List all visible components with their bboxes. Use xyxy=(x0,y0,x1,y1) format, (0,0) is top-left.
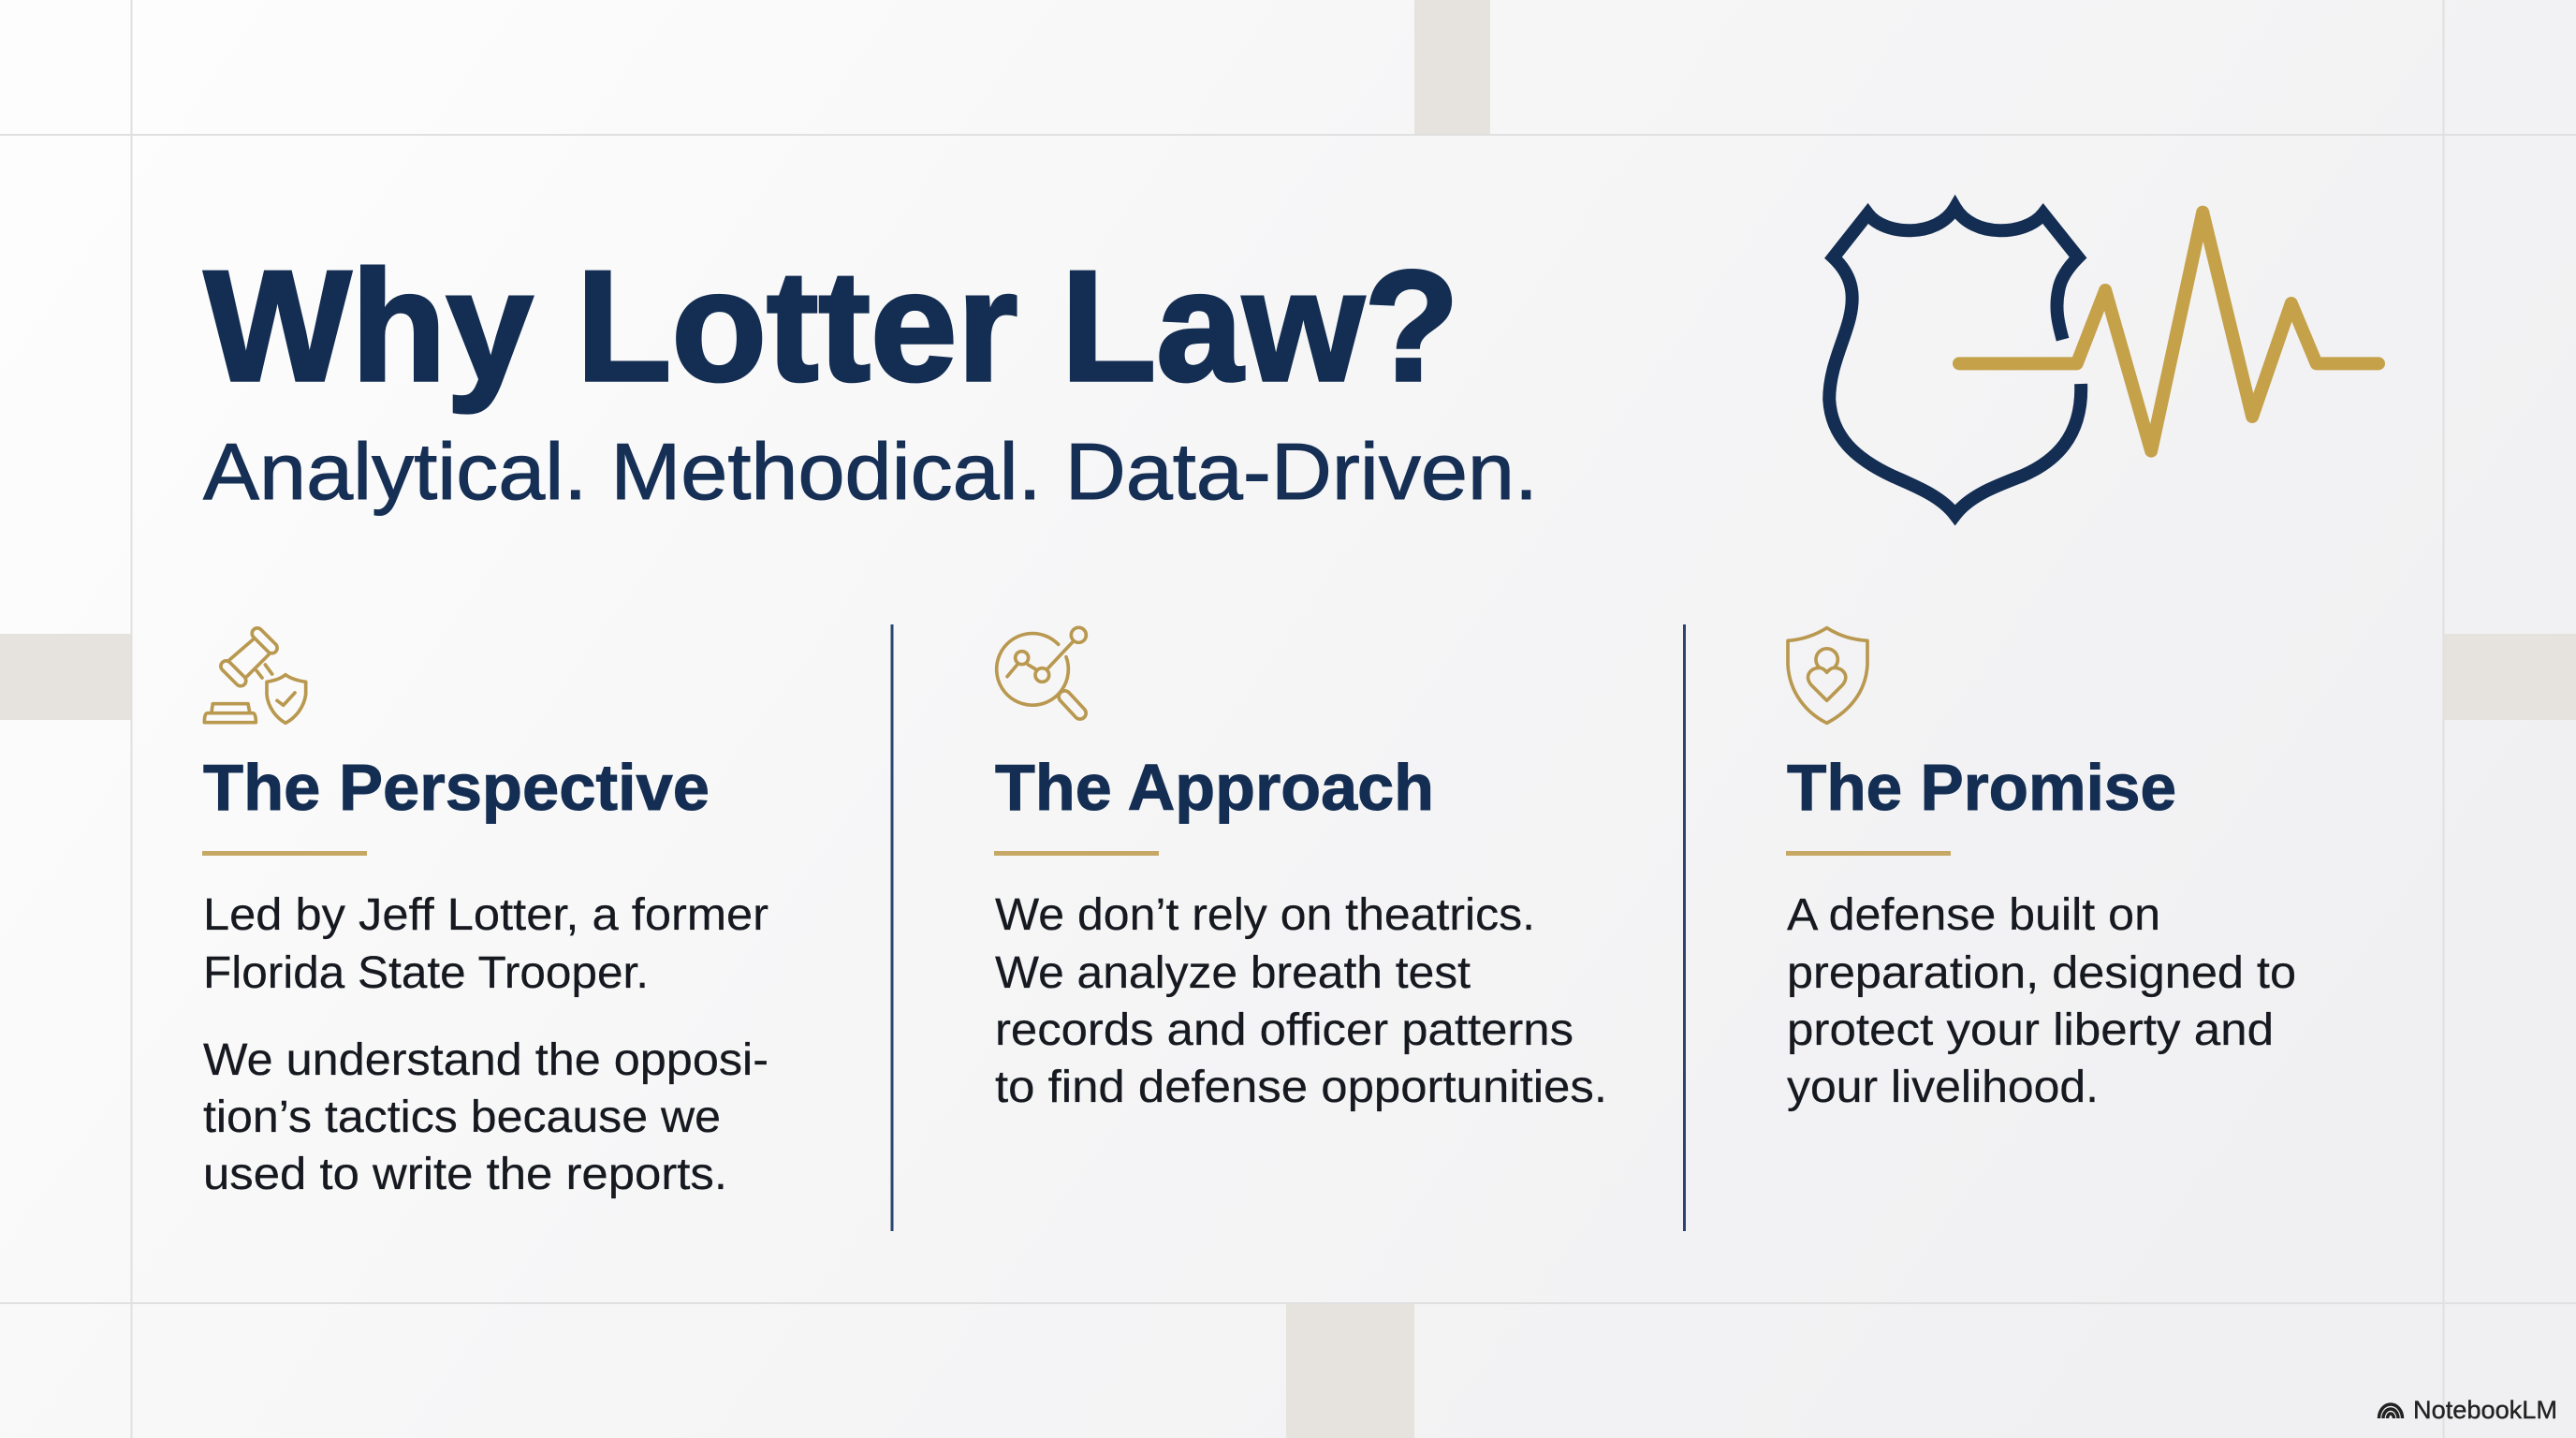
text: perspective paragraph two: tion’s tactics because we xyxy=(203,1093,721,1142)
text: promise paragraph xyxy=(1787,890,2296,1112)
panel: the perspective xyxy=(202,626,768,1199)
icon: police shield with gold pulse line xyxy=(1829,208,2378,515)
text: approach paragraph xyxy=(995,890,1607,1112)
text: perspective paragraph two: used to write the reports. xyxy=(203,1150,727,1199)
text: perspective paragraph two xyxy=(203,1035,768,1199)
text: promise paragraph: A defense built on xyxy=(1787,890,2160,940)
text: perspective paragraph one xyxy=(203,890,768,998)
logo: NotebookLM watermark xyxy=(2379,1396,2557,1424)
icon: gavel and shield xyxy=(204,626,306,723)
divider xyxy=(1683,624,1686,1231)
text: promise paragraph: your livelihood. xyxy=(1787,1063,2099,1112)
icon: pulse line xyxy=(1959,213,2378,451)
icon: magnifier with chart xyxy=(997,627,1089,722)
text: promise paragraph: protect your liberty and xyxy=(1787,1005,2274,1055)
panel: the promise xyxy=(1786,628,2296,1112)
gold rule xyxy=(994,851,1159,856)
text: perspective paragraph one: Led by Jeff Lotter, a former xyxy=(203,890,768,940)
text: approach paragraph: We analyze breath test xyxy=(995,948,1471,998)
text: promise paragraph: preparation, designed to xyxy=(1787,948,2296,998)
heading: the approach: The Approach xyxy=(995,751,1434,824)
text: approach paragraph: records and officer patterns xyxy=(995,1005,1573,1055)
text: perspective paragraph two: We understand the opposi- xyxy=(203,1035,768,1085)
subtitle: Analytical. Methodical. Data-Driven. xyxy=(203,428,1538,517)
text: perspective paragraph one: Florida State Trooper. xyxy=(203,948,649,998)
icon: NotebookLM arcs xyxy=(2379,1404,2402,1418)
text: NotebookLM: NotebookLM xyxy=(2413,1396,2557,1424)
heading: the promise: The Promise xyxy=(1787,751,2176,824)
text: approach paragraph: to find defense opportunities. xyxy=(995,1063,1607,1112)
text: approach paragraph: We don’t rely on theatrics. xyxy=(995,890,1535,940)
heading: the perspective: The Perspective xyxy=(203,751,710,824)
divider xyxy=(891,624,893,1231)
title: Why Lotter Law? xyxy=(204,238,1459,414)
gold rule xyxy=(202,851,367,856)
icon: shield outline xyxy=(1829,208,2081,515)
panel: the approach xyxy=(994,627,1607,1112)
icon: shield with heart lock xyxy=(1788,628,1867,723)
gold rule xyxy=(1786,851,1951,856)
